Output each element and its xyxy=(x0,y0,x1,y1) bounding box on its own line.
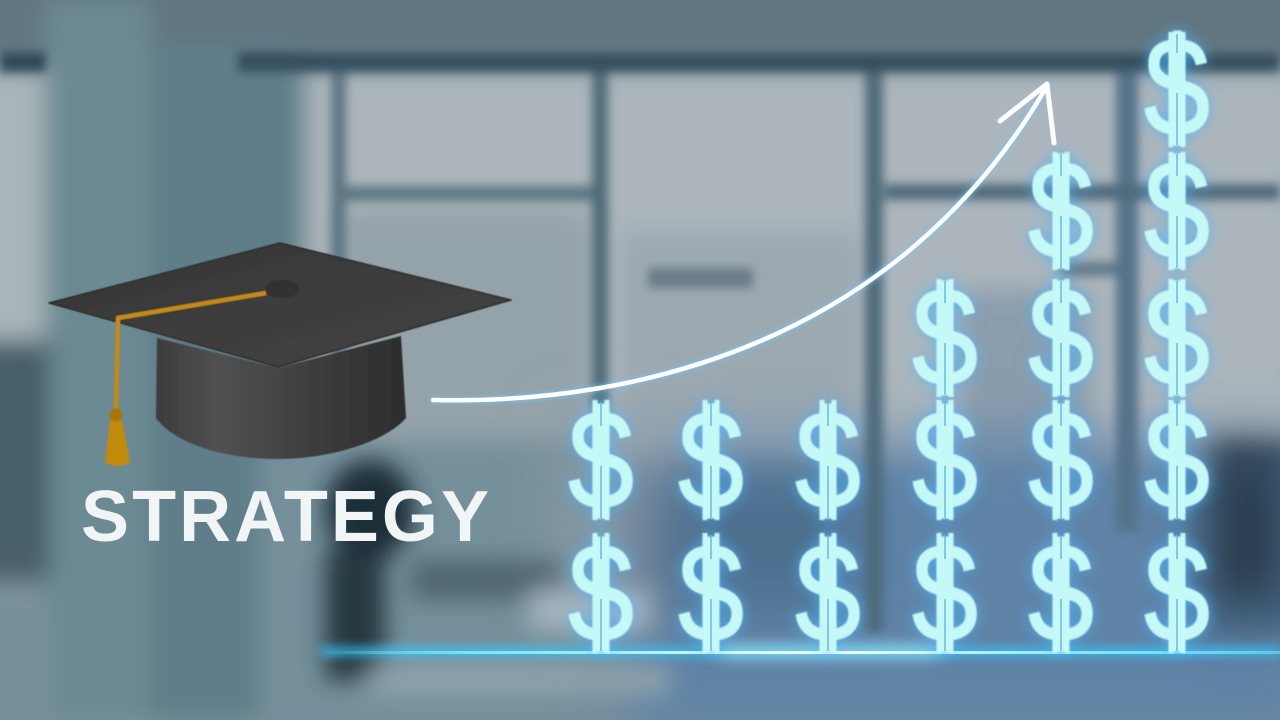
tassel knot xyxy=(110,408,122,422)
column 4: $ xyxy=(912,381,978,538)
column 5: $ xyxy=(1028,131,1094,288)
dollar sign centre slits xyxy=(601,34,1177,651)
arrow glow xyxy=(433,86,1047,400)
column 4 xyxy=(912,258,978,671)
arrow line xyxy=(433,86,1047,400)
tassel cord xyxy=(116,293,266,412)
column 4: $ xyxy=(912,258,978,415)
column 6: $ xyxy=(1144,8,1210,165)
cap board xyxy=(49,243,511,367)
tassel xyxy=(105,420,130,466)
cap button xyxy=(265,280,299,298)
column 6: $ xyxy=(1144,131,1210,288)
dollar signs xyxy=(568,8,1210,671)
double vertical bars of the dollar signs xyxy=(595,32,1183,653)
column 1: $ xyxy=(568,514,634,671)
column 5: $ xyxy=(1028,258,1094,415)
column 5: $ xyxy=(1028,381,1094,538)
column 6: $ xyxy=(1144,381,1210,538)
graduation cap icon xyxy=(49,243,511,466)
arrow head xyxy=(1000,84,1054,143)
column 2: $ xyxy=(678,381,744,538)
column 6: $ xyxy=(1144,258,1210,415)
column 3: $ xyxy=(795,381,861,538)
growth arrow xyxy=(433,84,1054,400)
column 3 xyxy=(795,381,861,671)
column 4: $ xyxy=(912,514,978,671)
column 3: $ xyxy=(795,514,861,671)
column 6 xyxy=(1144,8,1210,671)
baseline glow xyxy=(320,646,1280,656)
column 6: $ xyxy=(1144,514,1210,671)
title: STRATEGY: STRATEGY xyxy=(81,477,489,557)
column 1: $ xyxy=(568,381,634,538)
column 2 xyxy=(678,381,744,671)
column 5: $ xyxy=(1028,514,1094,671)
column 5 xyxy=(1028,131,1094,671)
column 2: $ xyxy=(678,514,744,671)
column 1 xyxy=(568,381,634,671)
dollar sign bar chart xyxy=(568,8,1210,671)
cap crown xyxy=(156,336,406,459)
